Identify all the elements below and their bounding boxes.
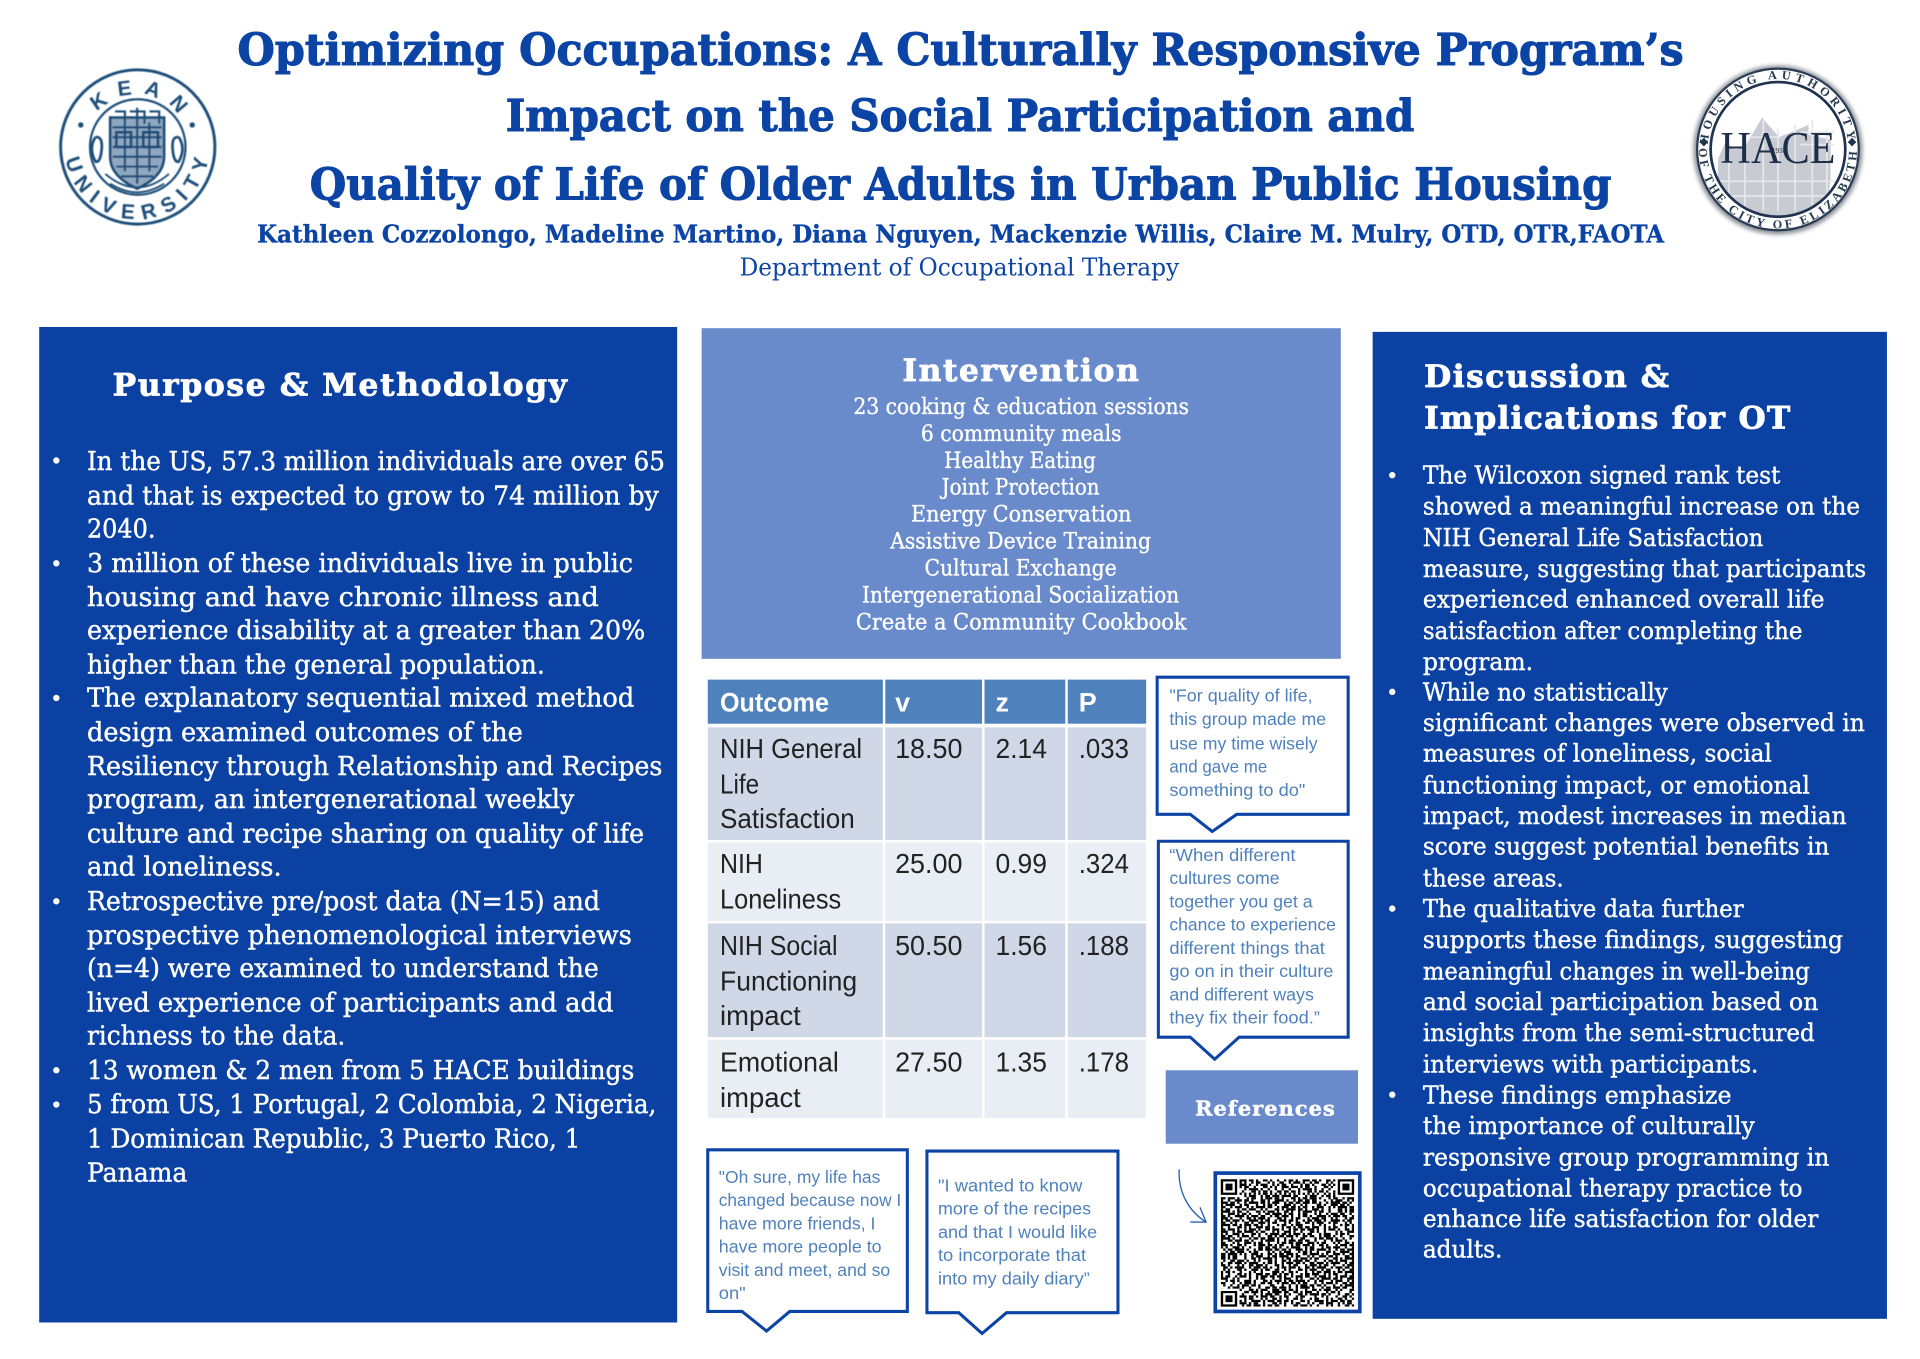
title: Quality of Life of Older Adults in Urban Public Housing <box>310 160 1611 211</box>
text block: intervention list: Create a Community Cookbook <box>856 610 1187 635</box>
text block: discussion bullets: showed a meaningful increase on the <box>1423 491 1860 520</box>
text block: purpose bullets: experience disability at a greater than 20% <box>87 616 645 646</box>
table: outcomes: impact <box>720 1000 801 1031</box>
text block: purpose bullets: and that is expected to grow to 74 million by <box>87 482 659 512</box>
table: outcomes: Outcome <box>720 687 829 717</box>
heading: intervention: Intervention <box>902 353 1139 389</box>
text block: purpose bullets: design examined outcomes of the <box>87 718 523 748</box>
text block: purpose bullets: Resiliency through Relationship and Recipes <box>87 752 662 782</box>
text block: purpose bullets: 3 million of these individuals live in public <box>87 549 633 579</box>
callout: quality of life quote: "For quality of life, <box>1169 686 1313 706</box>
text block: discussion bullets: supports these findings, suggesting <box>1423 925 1843 954</box>
table: outcomes: 1.56 <box>996 930 1047 961</box>
text block: discussion bullets <box>1389 461 1866 1264</box>
table: outcomes: 25.00 <box>895 848 962 879</box>
text block: intervention list: Cultural Exchange <box>924 557 1117 582</box>
text block: intervention list: 6 community meals <box>921 422 1122 447</box>
QR code <box>1215 1173 1360 1311</box>
table: outcomes: 2.14 <box>996 733 1047 764</box>
heading: discussion and implications: Discussion & <box>1424 359 1669 395</box>
icon: Kean University seal: KEAN <box>88 80 189 114</box>
text block: purpose bullets: 5 from US, 1 Portugal, 2 Colombia, 2 Nigeria, <box>87 1090 656 1120</box>
text block: discussion bullets: meaningful changes in well-being <box>1423 957 1810 986</box>
heading: discussion and implications <box>1424 359 1790 437</box>
text block: purpose bullets: program, an intergenerational weekly <box>87 785 575 815</box>
text block: intervention list: Healthy Eating <box>944 449 1096 474</box>
table: outcomes: v <box>895 687 910 717</box>
text block: discussion bullets: program. <box>1423 647 1533 676</box>
table: outcomes: Functioning <box>720 966 857 997</box>
text block: discussion bullets: enhance life satisfaction for older <box>1423 1204 1819 1233</box>
callout: different cultures quote: together you get a <box>1169 891 1313 911</box>
text block: discussion bullets: score suggest potential benefits in <box>1423 832 1830 861</box>
callout: different cultures quote: go on in their culture <box>1169 961 1334 981</box>
text block: discussion bullets: satisfaction after completing the <box>1423 616 1802 645</box>
table: outcomes: P <box>1079 687 1097 717</box>
icon: HACE seal: 1938 <box>1772 146 1787 155</box>
text block: intervention list: Joint Protection <box>940 476 1100 501</box>
text block: discussion bullets: adults. <box>1423 1235 1502 1264</box>
table: outcomes: 1.35 <box>996 1046 1047 1077</box>
text block: purpose bullets: Retrospective pre/post data (N=15) and <box>87 887 600 917</box>
panel: intervention <box>702 328 1341 659</box>
text block: purpose bullets <box>53 447 665 1189</box>
text block: discussion bullets: and social participation based on <box>1423 987 1819 1016</box>
title: Optimizing Occupations: A Culturally Responsive Program’s <box>238 25 1684 76</box>
panel: references: References <box>1195 1096 1335 1121</box>
table: outcomes: z <box>996 687 1009 717</box>
callout: different cultures quote: different things that <box>1169 938 1325 958</box>
table: outcomes <box>708 680 1146 1118</box>
text block: discussion bullets: insights from the semi-structured <box>1423 1018 1815 1047</box>
text block: purpose bullets: Panama <box>87 1159 187 1189</box>
text block: discussion bullets: occupational therapy practice to <box>1423 1173 1802 1202</box>
callout: quality of life quote: use my time wisely <box>1169 733 1318 753</box>
text block: intervention list: Assistive Device Training <box>889 530 1151 555</box>
text block: intervention list: Energy Conservation <box>911 503 1131 528</box>
callout: quality of life quote: something to do" <box>1169 780 1305 800</box>
text block: discussion bullets: interviews with participants. <box>1423 1050 1758 1079</box>
text block: intervention list: 23 cooking & education sessions <box>853 395 1189 420</box>
callout: recipes quote: and that I would like <box>938 1222 1097 1242</box>
text block: purpose bullets: 13 women & 2 men from 5 HACE buildings <box>87 1056 634 1086</box>
callout: friends quote: "Oh sure, my life has <box>719 1167 881 1187</box>
text block: discussion bullets: The qualitative data further <box>1423 894 1744 923</box>
icon: HACE seal: HOUSING AUTHORITY <box>1700 70 1856 144</box>
text block: purpose bullets: lived experience of participants and add <box>87 988 613 1018</box>
panel: discussion and implications <box>1373 332 1887 1319</box>
table: outcomes: Loneliness <box>720 884 841 915</box>
text block: discussion bullets: These findings emphasize <box>1423 1080 1731 1109</box>
text block: purpose bullets: richness to the data. <box>87 1022 345 1052</box>
table: outcomes: Life <box>720 769 759 800</box>
callout: recipes quote: to incorporate that <box>938 1245 1086 1265</box>
text block: discussion bullets: experienced enhanced overall life <box>1423 584 1824 613</box>
table: outcomes: NIH Social <box>720 930 838 961</box>
table: outcomes: .324 <box>1079 848 1129 879</box>
icon: HACE seal <box>1690 62 1866 238</box>
text block: discussion bullets: measure, suggesting that participants <box>1423 554 1866 583</box>
authors: Kathleen Cozzolongo, Madeline Martino, Diana Nguyen, Mackenzie Willis, Claire M. Mulry, OTD, OTR,FAOTA <box>257 219 1665 248</box>
text block: purpose bullets: culture and recipe sharing on quality of life <box>87 819 644 849</box>
heading: discussion and implications: Implications for OT <box>1424 401 1790 437</box>
table: outcomes: 50.50 <box>895 930 962 961</box>
table: outcomes: .178 <box>1079 1046 1129 1077</box>
panel: purpose and methodology <box>39 327 677 1322</box>
icon: Kean University seal: UNIVERSITY <box>66 156 208 220</box>
text block: purpose bullets: prospective phenomenological interviews <box>87 921 632 951</box>
callout: different cultures quote: chance to experience <box>1169 915 1336 935</box>
icon: Kean University seal <box>58 68 218 226</box>
callout: different cultures quote: “When different <box>1169 845 1296 865</box>
text block: purpose bullets: higher than the general population. <box>87 650 545 680</box>
icon: HACE seal: OF THE CITY OF ELIZABETH <box>1699 148 1857 228</box>
text block: purpose bullets: The explanatory sequential mixed method <box>87 684 634 714</box>
table: outcomes: impact <box>720 1082 801 1113</box>
callout: friends quote <box>708 1150 907 1331</box>
text block: discussion bullets: While no statistically <box>1423 677 1668 706</box>
text block: discussion bullets: responsive group programming in <box>1423 1143 1830 1172</box>
text block: purpose bullets: In the US, 57.3 million individuals are over 65 <box>87 447 665 477</box>
text block: discussion bullets: these areas. <box>1423 864 1564 893</box>
callout: different cultures quote: cultures come <box>1169 868 1280 888</box>
callout: recipes quote <box>927 1151 1118 1334</box>
arrow: to QR code <box>1179 1169 1206 1222</box>
title <box>238 25 1684 211</box>
icon: HACE seal: HACE <box>1720 123 1836 173</box>
callout: friends quote: on" <box>719 1283 746 1303</box>
text block: intervention list <box>853 395 1189 635</box>
callout: different cultures quote: and different ways <box>1169 984 1314 1004</box>
text block: discussion bullets: The Wilcoxon signed rank test <box>1423 461 1781 490</box>
table: outcomes: 0.99 <box>996 848 1047 879</box>
callout: different cultures quote: they fix their food.” <box>1169 1008 1320 1028</box>
title: Impact on the Social Participation and <box>506 91 1414 142</box>
callout: friends quote: visit and meet, and so <box>719 1260 890 1280</box>
table: outcomes: NIH <box>720 848 763 879</box>
text block: purpose bullets: 2040. <box>87 515 156 545</box>
callout: different cultures quote <box>1158 841 1348 1059</box>
text block: discussion bullets: the importance of culturally <box>1423 1111 1755 1140</box>
text block: discussion bullets: measures of loneliness, social <box>1423 739 1772 768</box>
callout: friends quote: have more friends, I <box>719 1213 876 1233</box>
text block: purpose bullets: (n=4) were examined to understand the <box>87 954 599 984</box>
callout: friends quote: changed because now I <box>719 1190 901 1210</box>
heading: purpose and methodology: Purpose & Methodology <box>113 368 568 404</box>
text block: purpose bullets: and loneliness. <box>87 853 282 883</box>
callout: quality of life quote: and gave me <box>1169 757 1267 777</box>
text block: discussion bullets: functioning impact, or emotional <box>1423 770 1810 799</box>
text block: discussion bullets: impact, modest increases in median <box>1423 801 1847 830</box>
table: outcomes: Emotional <box>720 1046 839 1077</box>
callout: quality of life quote <box>1157 677 1348 831</box>
callout: friends quote: have more people to <box>719 1237 882 1257</box>
table: outcomes: 27.50 <box>895 1046 962 1077</box>
table: outcomes: 18.50 <box>895 733 962 764</box>
callout: recipes quote: into my daily diary” <box>938 1269 1090 1289</box>
table: outcomes: .033 <box>1079 733 1129 764</box>
callout: recipes quote: "I wanted to know <box>938 1175 1083 1195</box>
callout: quality of life quote: this group made me <box>1169 709 1326 729</box>
table: outcomes: .188 <box>1079 930 1129 961</box>
panel: references <box>1166 1070 1358 1144</box>
text block: intervention list: Intergenerational Socialization <box>862 583 1179 608</box>
callout: recipes quote: more of the recipes <box>938 1199 1091 1219</box>
text block: discussion bullets: NIH General Life Satisfaction <box>1423 523 1763 552</box>
table: outcomes: Satisfaction <box>720 803 855 834</box>
text block: purpose bullets: housing and have chronic illness and <box>87 583 599 613</box>
table: outcomes: NIH General <box>720 733 862 764</box>
department: Department of Occupational Therapy <box>740 254 1180 282</box>
text block: discussion bullets: significant changes were observed in <box>1423 708 1865 737</box>
text block: purpose bullets: 1 Dominican Republic, 3 Puerto Rico, 1 <box>87 1124 580 1154</box>
